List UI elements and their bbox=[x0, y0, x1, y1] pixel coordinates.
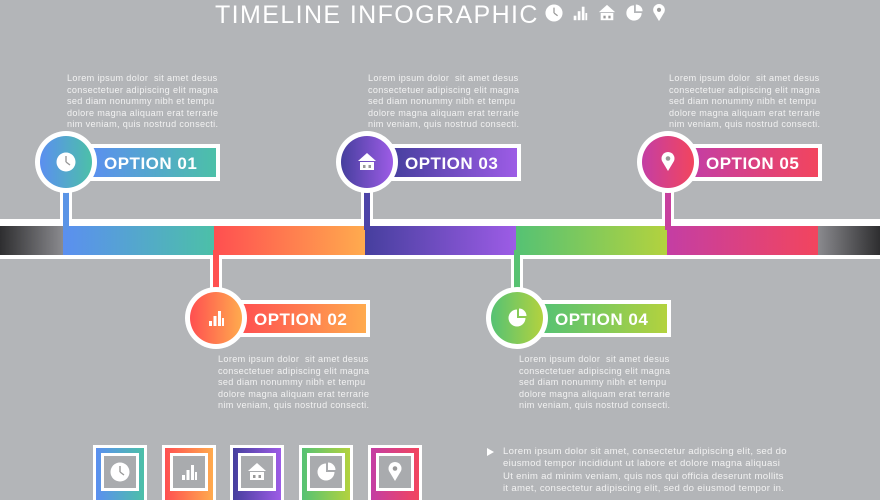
text: option 02: nim veniam, quis nostrud consecti. bbox=[218, 400, 369, 410]
title: TIMELINE INFOGRAPHIC bbox=[215, 1, 539, 29]
text: option 04 bbox=[519, 354, 670, 410]
text: option 05: Lorem ipsum dolor sit amet desus bbox=[669, 73, 820, 83]
option 01 bbox=[35, 131, 220, 230]
text: option 04: Lorem ipsum dolor sit amet desus bbox=[519, 354, 670, 364]
text: option 05: consectetuer adipiscing elit magna bbox=[669, 85, 820, 95]
bullet arrow bbox=[487, 448, 494, 456]
text: option 03: nim veniam, quis nostrud consecti. bbox=[368, 119, 519, 129]
text: option 03: Lorem ipsum dolor sit amet desus bbox=[368, 73, 519, 83]
option 03: OPTION 03 bbox=[405, 154, 498, 173]
icon squares bbox=[93, 445, 422, 500]
text: option 03 bbox=[368, 73, 519, 129]
text: option 01: dolore magna aliquam erat terrarie bbox=[67, 108, 218, 118]
text: option 04: dolore magna aliquam erat terrarie bbox=[519, 389, 670, 399]
bottom paragraph: eiusmod tempor incididunt ut labore et dolore magna aliquasi bbox=[503, 458, 780, 469]
option 05: OPTION 05 bbox=[706, 154, 799, 173]
bottom paragraph: Lorem ipsum dolor sit amet, consectetur adipiscing elit, sed do bbox=[503, 446, 787, 457]
text: option 03: consectetuer adipiscing elit magna bbox=[368, 85, 519, 95]
text: option 02: dolore magna aliquam erat terrarie bbox=[218, 389, 369, 399]
option 03 bbox=[336, 131, 521, 230]
option 01: OPTION 01 bbox=[104, 154, 197, 173]
text: option 03: sed diam nonummy nibh et tempu bbox=[368, 96, 515, 106]
bottom paragraph: it amet, consectetur adipiscing elit, sed do eiusmod tempor in. bbox=[503, 483, 784, 494]
text: option 05: nim veniam, quis nostrud consecti. bbox=[669, 119, 820, 129]
text: option 01: sed diam nonummy nibh et tempu bbox=[67, 96, 214, 106]
text: option 02: Lorem ipsum dolor sit amet desus bbox=[218, 354, 369, 364]
option 02: OPTION 02 bbox=[254, 310, 347, 329]
option 04: OPTION 04 bbox=[555, 310, 648, 329]
bottom paragraph bbox=[503, 446, 787, 494]
text: option 01: Lorem ipsum dolor sit amet desus bbox=[67, 73, 218, 83]
text: option 04: consectetuer adipiscing elit magna bbox=[519, 366, 670, 376]
text: option 01: consectetuer adipiscing elit magna bbox=[67, 85, 218, 95]
option 02 bbox=[185, 250, 370, 349]
timeline band bbox=[0, 219, 880, 259]
text: option 04: sed diam nonummy nibh et tempu bbox=[519, 377, 666, 387]
text: option 05 bbox=[669, 73, 820, 129]
text: option 01 bbox=[67, 73, 218, 129]
text: option 02 bbox=[218, 354, 369, 410]
text: option 02: consectetuer adipiscing elit magna bbox=[218, 366, 369, 376]
text: option 01: nim veniam, quis nostrud consecti. bbox=[67, 119, 218, 129]
text: option 02: sed diam nonummy nibh et tempu bbox=[218, 377, 365, 387]
text: option 04: nim veniam, quis nostrud consecti. bbox=[519, 400, 670, 410]
text: option 05: sed diam nonummy nibh et tempu bbox=[669, 96, 816, 106]
bottom paragraph: Ut enim ad minim veniam, quis nos qui officia deserunt mollits bbox=[503, 471, 784, 482]
text: option 05: dolore magna aliquam erat terrarie bbox=[669, 108, 820, 118]
option 05 bbox=[637, 131, 822, 230]
option 04 bbox=[486, 250, 671, 349]
text: option 03: dolore magna aliquam erat terrarie bbox=[368, 108, 519, 118]
